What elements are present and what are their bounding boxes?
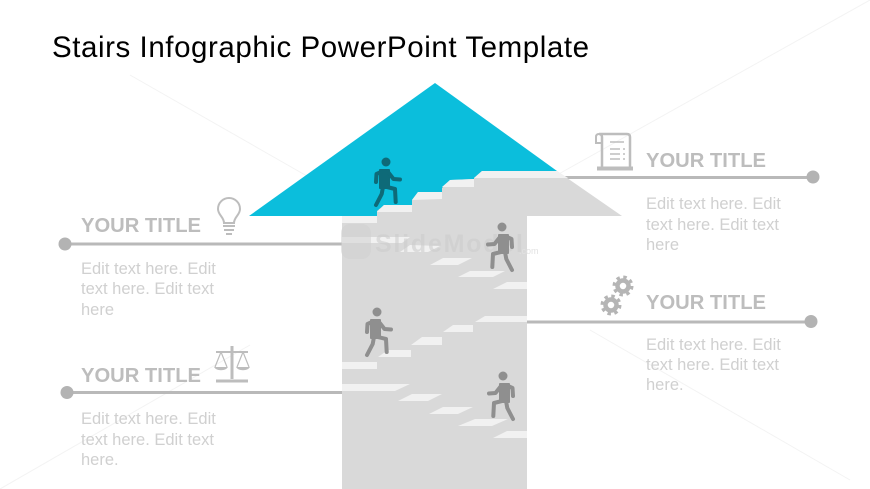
icon: scales (214, 346, 250, 381)
block: upper left text: text here. Edit text (81, 280, 214, 298)
watermark (341, 224, 539, 259)
block: upper left text: here (81, 301, 114, 319)
watermark: .com (519, 246, 539, 256)
figure: walker lower right (489, 372, 513, 419)
icon: gears (602, 277, 632, 314)
block: lower left text: YOUR TITLE (81, 365, 201, 387)
arrow head: blue triangle (249, 83, 557, 216)
connector: lower left (60, 386, 345, 399)
block: lower left text: Edit text here. Edit (81, 410, 216, 428)
block: top right text: YOUR TITLE (646, 150, 766, 172)
connector: top right (557, 170, 820, 184)
block: top right text (646, 150, 781, 254)
block: lower right text: text here. Edit text (646, 356, 779, 374)
block: upper left text: YOUR TITLE (81, 215, 201, 237)
block: lower left text: here. (81, 451, 119, 469)
watermark: SlideModel (375, 230, 523, 258)
icon: scroll (596, 134, 633, 168)
block: lower right text: Edit text here. Edit (646, 336, 781, 354)
block: upper left text: Edit text here. Edit (81, 260, 216, 278)
block: top right text: text here. Edit text (646, 216, 779, 234)
block: lower right text: here. (646, 376, 684, 394)
block: lower left text: text here. Edit text (81, 431, 214, 449)
connector: upper left (58, 238, 345, 250)
block: top right text: here (646, 236, 679, 254)
icon: light bulb (218, 198, 240, 234)
figure: walker upper right (488, 222, 512, 270)
connector: lower right (525, 315, 818, 328)
figure: walker middle left (367, 308, 391, 355)
block: lower right text (646, 292, 781, 394)
block: lower right text: YOUR TITLE (646, 292, 766, 314)
arrow body with stairs (342, 171, 622, 489)
figure: walker teal (376, 158, 400, 205)
block: lower left text (81, 365, 216, 469)
title: Stairs Infographic PowerPoint Template (52, 31, 589, 64)
block: top right text: Edit text here. Edit (646, 195, 781, 213)
block: upper left text (81, 215, 216, 319)
